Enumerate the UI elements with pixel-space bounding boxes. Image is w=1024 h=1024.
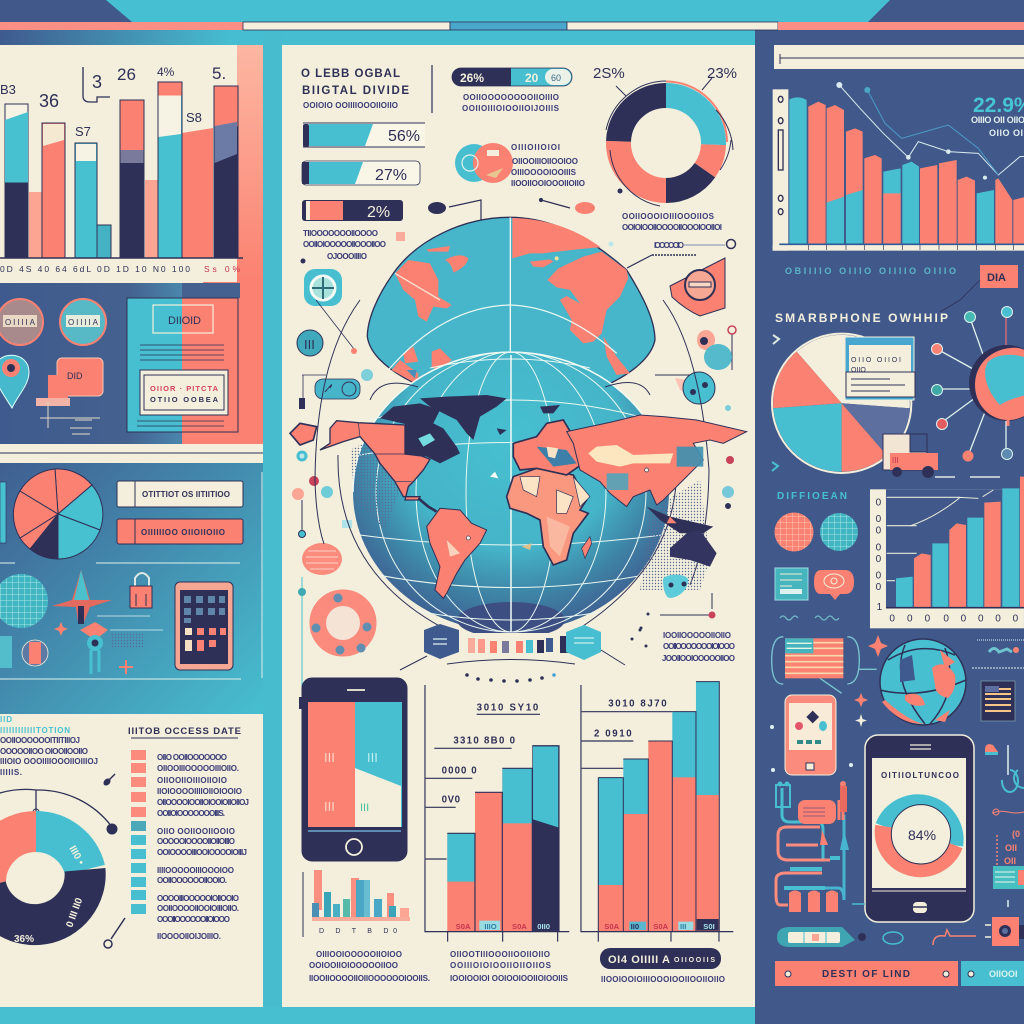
chart: growth bars: 0 — [876, 554, 882, 565]
background: left column gradient — [0, 30, 755, 1024]
phone: split chart: III — [360, 802, 369, 814]
browser card: OIIO OIIOI — [851, 357, 901, 364]
progress bar 56% — [303, 123, 425, 147]
intro text: IID — [0, 715, 12, 724]
donut chart — [0, 789, 118, 945]
bar chart 2: IIIO — [484, 922, 497, 931]
footer label coral — [775, 961, 958, 986]
main phone donut — [865, 735, 974, 922]
combo chart — [773, 82, 1024, 251]
icon: mesh globe — [0, 574, 48, 628]
bar chart 3: 3010 8J70 — [608, 699, 667, 710]
icon: navy hexagon — [424, 624, 459, 659]
intro text — [0, 715, 98, 777]
bar value labels: 4% — [157, 65, 175, 79]
phone chart caption — [309, 950, 430, 983]
small line icons — [883, 930, 976, 945]
navy pill label: OI4 OIIIII A — [608, 954, 670, 966]
icon: teal document — [775, 568, 808, 600]
legend text: OIIOOIIOIIIOIIOIO — [157, 776, 227, 785]
label box 2 — [117, 519, 243, 544]
footer label teal: OIIOOI — [989, 969, 1018, 979]
chart: growth bars: 0 — [978, 613, 984, 624]
small phone — [785, 695, 836, 775]
dotted arc — [465, 673, 556, 683]
donut chart: 36% — [14, 934, 34, 945]
bar chart 2 — [425, 685, 569, 942]
legend heading: IIITOB OCCESS DATE — [128, 726, 241, 737]
pill caption — [462, 93, 560, 113]
icon: left network badge — [304, 269, 342, 306]
icon: delivery truck: III — [892, 456, 899, 465]
browser card: OIIO — [851, 367, 866, 374]
phone: split chart: III — [324, 750, 335, 765]
bars — [5, 82, 238, 258]
bar value labels: 5. — [212, 64, 226, 83]
bar chart 3: S0I — [703, 922, 715, 931]
legend text: IIIIOOOOOIIIOOOIOO — [157, 866, 234, 875]
icon: left figures — [0, 636, 48, 668]
chart: growth bars: 0 — [943, 613, 949, 624]
chart 2 caption — [450, 950, 569, 983]
document split card — [127, 298, 238, 432]
panel: central cream column — [282, 45, 755, 1007]
bar value labels: S7 — [75, 124, 91, 139]
navy pill label: OIIOOIIS — [674, 957, 715, 964]
icon: badge left: OIIIIA — [5, 318, 36, 327]
label box 1: OTITTIOT OS IITIITIOO — [142, 490, 230, 499]
outer orbit arcs — [315, 300, 709, 628]
footer label coral: DESTI OF LIND — [822, 969, 910, 980]
sparkle marks — [54, 622, 133, 674]
panel: right column — [770, 45, 1024, 986]
chart: growth bars: 0 — [995, 613, 1001, 624]
phone chart caption: OIIIOOIOOOOOIIOIOO — [316, 950, 402, 959]
panel: top-left bar chart: Ss 0% — [204, 264, 240, 274]
chart: growth bars — [870, 477, 1024, 628]
donut chart: 0 III II0 — [64, 896, 85, 929]
chart: top-right donut — [593, 65, 737, 206]
main phone donut: 84% — [908, 827, 936, 843]
bars caption: OJOOOIIIIO — [327, 252, 367, 261]
progress bar 56%: 56% — [388, 128, 420, 145]
phone chart caption: OOIOOIIOIOOOOOIIOO — [309, 961, 398, 970]
flag card — [772, 637, 877, 693]
icon: patchwork globe — [880, 639, 966, 725]
legend text: OIIO OOIIOOIIOOIO — [157, 827, 235, 836]
bar chart 3: 2 0910 — [594, 729, 632, 740]
top rule bar — [774, 45, 1024, 69]
bar value labels: 36 — [39, 91, 59, 111]
icon: left circle badge — [297, 330, 323, 356]
bar chart 3 — [581, 682, 733, 942]
legend text: OOIIOIOOOOOOOIIIS. — [157, 809, 225, 818]
document split card: OIIOR · PITCTA — [150, 384, 219, 393]
chart: top-right donut: 2S% — [593, 65, 625, 82]
icon: restricted shield — [670, 258, 725, 316]
intro text: IIIOIO OOOIIIIOOOIIOIIIOJ — [0, 757, 98, 766]
lower right caption: JOOIIOOIOOOOOIIOO — [662, 654, 735, 663]
intro text: OOIIOOOOOOITIITIIIOJ — [0, 736, 80, 745]
legend swatches — [131, 750, 146, 914]
document split card: DIIOID — [168, 315, 201, 327]
icon: chat bubbles: DID — [67, 371, 83, 381]
icon: coral speech bubble — [814, 570, 854, 600]
right side icons — [972, 640, 1024, 946]
bar chart 3: III — [680, 922, 686, 931]
legend text: IIOIOOOOIIIIOIIOIOOIO — [157, 787, 242, 796]
icon: coral ring — [312, 594, 372, 654]
chart 2 caption: IOOIOOIOI OOIOOIOOIIOIOOIIS — [450, 974, 569, 983]
legend text: IIOOOOIIOIJOIIIO. — [157, 932, 221, 941]
capsule switch — [777, 927, 866, 947]
bars caption: TIIOOOOOOOIIOOOO — [303, 229, 378, 238]
pointers to dome — [428, 198, 652, 268]
legend text: OIIOOOOIOOIIOIOOIOIIOIIOJ — [157, 798, 249, 807]
bar chart 3: II0 — [631, 922, 639, 931]
icon: badge left — [0, 299, 43, 345]
bars caption: OOIIOIOOOOOIIOOOIIOO — [303, 240, 386, 249]
icon: tablet — [175, 582, 233, 670]
grid circles — [774, 512, 858, 552]
chevrons — [772, 335, 779, 471]
bar chart 3: S0A — [604, 922, 620, 931]
icon: badge right: OIIIIA — [68, 318, 99, 327]
bar chart 2: 3310 8B0 0 — [453, 735, 515, 746]
icon: badge right — [60, 299, 106, 345]
navy pill label — [600, 948, 721, 969]
lower right caption: IOOIIOOOOOIIOIIO — [663, 631, 731, 640]
icon: lollipop marker — [104, 918, 125, 948]
bar chart 2: 0V0 — [442, 795, 460, 806]
progress bar 27%: 27% — [375, 167, 407, 184]
right side icons: 0) — [1012, 870, 1020, 880]
panel: device and document tiles — [0, 283, 263, 463]
icon: teal hexagon — [566, 625, 601, 660]
chart: growth bars: 0 — [961, 613, 967, 624]
chart: growth bars: 0 — [889, 613, 895, 624]
legend text — [157, 753, 249, 941]
icon: right ornament cluster — [655, 326, 736, 509]
icon: delivery truck — [883, 434, 938, 478]
globe: upper dome — [367, 217, 655, 400]
icon: chat bubbles — [36, 358, 103, 434]
chart: growth bars: 0 — [907, 613, 913, 624]
bar value labels: 26 — [117, 65, 136, 84]
icon: padlock — [130, 573, 152, 608]
lower right caption — [662, 631, 735, 663]
icon: two-lobed circle — [455, 143, 513, 183]
intro text: OOOOOIIOO OIOOIIOOIIO — [0, 747, 88, 756]
intro text: IIIIIIIIIIIITOTION — [0, 726, 70, 735]
chart axis caption: OBIIIIO OIIIO OIIIIO OIIIO — [785, 266, 956, 276]
sparkles — [770, 635, 888, 772]
legend text: OOIIOOOOIIOOIOIIIOIIO. — [157, 904, 239, 913]
right side icons: OII — [1004, 856, 1016, 866]
pill caption: IIOOIOOIOIIIOOOIOOIIOOIIOIIO — [601, 975, 725, 984]
icon: map pin — [0, 355, 29, 408]
bar value labels: S8 — [186, 110, 202, 125]
chart: growth bars: 0 — [1013, 613, 1019, 624]
headline stat: OIIIO OII OIIO — [971, 115, 1024, 125]
progress bar 27% — [302, 161, 420, 185]
legend text: OOOOOIOOOOIIOIIOIIIO — [157, 837, 235, 846]
chart: top-right donut: 23% — [707, 65, 737, 82]
lobed icon caption — [511, 143, 585, 188]
lobed icon caption: IIOOIIOOIOOOIIOIIO — [511, 179, 585, 188]
bar value labels: 3 — [92, 72, 102, 92]
legend text: OOOOIIIOOOOOIOIIOOIO — [157, 894, 239, 903]
right scatter — [630, 575, 716, 648]
chart: growth bars: 0 — [876, 514, 882, 525]
legend text: OIIOOIIIOOOOOIIIOIIO. — [157, 764, 239, 773]
right caption: OOIIOOOIOIIIOOOIIOS — [622, 212, 715, 221]
headline stat: OIIO OI — [989, 128, 1023, 138]
label box 2: OIIIIIIOO OIIOIIOIIO — [141, 528, 225, 537]
heading: smartphone ownership: SMARBPHONE OWHHIP — [775, 311, 948, 325]
pipes illustration — [776, 781, 865, 912]
legend text: OIIO OOIIOOOOOOO — [157, 753, 227, 762]
pill stat: 20 — [525, 71, 539, 85]
chart: growth bars: 1 — [877, 602, 883, 613]
chart 2 caption: OOIIIOIOIOOIIOIIOIIOS — [450, 961, 552, 970]
panel: bottom-left donut and legend — [0, 714, 263, 1007]
right side icons: (0 — [1012, 829, 1020, 839]
browser card — [845, 337, 915, 400]
mini bar chart: D D T B D0 — [319, 928, 397, 935]
pie chart: ownership — [772, 334, 911, 473]
right caption: OOIOIOOIIOOOOIIOOOIOOIIOI — [622, 223, 722, 232]
headline stat — [971, 94, 1024, 138]
pill stat — [452, 68, 572, 86]
coral tag — [980, 265, 1018, 288]
lower right caption: OOIIOOOOOOOIOIOOO — [663, 642, 735, 651]
chart: growth bars: 0 — [876, 542, 882, 553]
legend text: OOIIOOOOOOIIOOIO. — [157, 876, 227, 885]
pill stat: 26% — [460, 71, 484, 85]
progress bar 2% — [302, 200, 403, 221]
mini bar chart — [303, 870, 410, 937]
chart: growth bars: 0 — [876, 582, 882, 593]
icon: capsule — [315, 379, 360, 399]
pill caption: OOIIOIIIOIOOIIOIJOIIIS — [462, 104, 560, 113]
title: O LEBB OGBAL — [301, 68, 400, 80]
header band — [0, 0, 1024, 30]
icon: arrow and pin — [52, 570, 112, 624]
label: diffusion: DIFFIOEAN — [777, 491, 847, 502]
main phone donut: OITIIOLTUNCOO — [881, 771, 959, 780]
panel: pie and icons — [0, 469, 262, 679]
world map — [290, 395, 747, 598]
bar value labels — [0, 64, 226, 139]
right caption — [622, 212, 722, 250]
bar chart 2: 0II0 — [537, 922, 550, 931]
title: BIIGTAL DIVIDE — [302, 85, 409, 97]
pill caption: OOIIOOOOOOOOIIOIIIO — [463, 93, 559, 102]
globe: main sphere — [290, 300, 747, 647]
phone: split chart — [299, 678, 407, 861]
donut chart: III0 • — [66, 844, 86, 867]
bar chart 2: 0000 0 — [442, 765, 477, 776]
bars caption — [303, 229, 386, 261]
side ornaments — [292, 369, 373, 690]
network globe — [932, 306, 1024, 462]
bar chart 2: S0A — [512, 922, 527, 931]
label box 1 — [117, 481, 243, 507]
chart: growth bars: 0 — [925, 613, 931, 624]
pie chart — [13, 469, 103, 559]
chart: growth bars: 0 — [876, 570, 882, 581]
icon: pin marker — [102, 774, 115, 787]
phone chart caption: IIOOIIOOOOIIOIIOOOOOOIOOIIS. — [309, 974, 430, 983]
icon: tower and dish — [80, 622, 108, 674]
bar chart 2: 3010 SY10 — [477, 703, 538, 714]
title: OOIOIO OOIIIIOOOIIOIIO — [303, 101, 398, 110]
phone: split chart: III — [367, 750, 378, 765]
progress bar 2%: 2% — [367, 204, 390, 221]
title — [301, 68, 409, 110]
right side icons: OII — [1005, 843, 1017, 853]
phone: split chart: III — [324, 799, 335, 814]
lobed icon caption: OIIIOIIOIOI — [511, 143, 560, 152]
colour scale — [468, 636, 568, 653]
chart 2 caption: OIIOOTIIIOOOIIOOIIOIIO — [450, 950, 550, 959]
lobed icon caption: OIIIOOOOIOOIIIS — [511, 168, 577, 177]
coral tag: DIA — [987, 272, 1006, 284]
chart: growth bars: 0 — [876, 526, 882, 537]
bar value labels: B3 — [0, 82, 16, 97]
icon: left circle badge: III — [304, 337, 315, 352]
legend text: OOOIIOOOOOOIIOIOOO — [157, 915, 230, 924]
footer label teal — [961, 961, 1024, 986]
legend text: OOIOOOOIIIOOIOOOOIOIIIJ — [157, 848, 247, 857]
lobed icon caption: OIIOOIIIOIIOOIOO — [512, 157, 578, 166]
axis labels: 0D 4S 40 64 6dL 0D 1D 10 N0 100 — [0, 264, 190, 274]
bar chart 2: S0A — [456, 922, 471, 931]
panel: top-left bar chart — [0, 45, 263, 445]
chart: growth bars: 0 — [876, 497, 882, 508]
document split card: OTIIO OOBEA — [150, 395, 219, 404]
bar chart 3: S0A — [653, 922, 669, 931]
right caption: IOOOOOIO — [654, 241, 684, 250]
halftone dots — [350, 440, 710, 590]
bracket mark — [83, 67, 110, 102]
intro text: IIIIIS. — [0, 768, 22, 777]
pill stat: 60 — [551, 73, 561, 83]
